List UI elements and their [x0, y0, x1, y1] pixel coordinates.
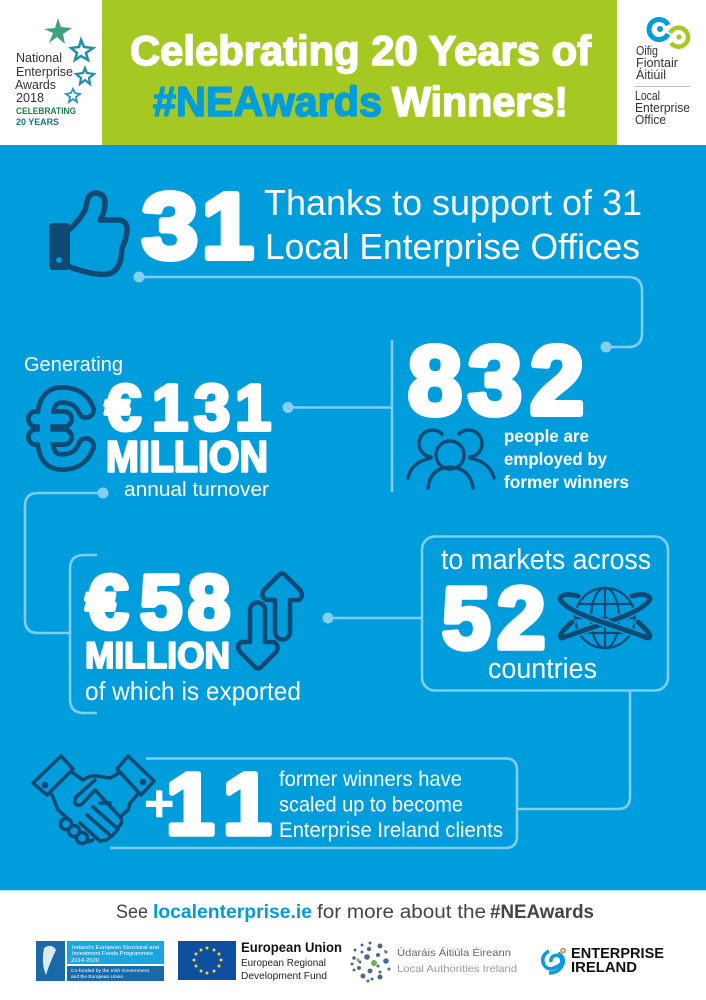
stat: 31: 1	[202, 174, 254, 278]
footer call to action: for more about the	[317, 902, 486, 923]
text: to markets across: to markets across	[441, 544, 651, 576]
logo: Ireland structural funds: 2014-2020	[71, 958, 99, 964]
panel: markets box	[422, 536, 668, 690]
logo: National Enterprise Awards: 2018	[16, 91, 44, 105]
connector: exports to markets	[322, 612, 422, 624]
title	[130, 27, 592, 125]
stat: 31	[142, 174, 254, 278]
icon: euro	[36, 395, 86, 462]
connector: turnover to exports	[25, 488, 108, 633]
text: former winners: scaled up to become	[279, 792, 463, 816]
title: #NEAwards	[153, 78, 382, 125]
logo: Ireland structural funds	[36, 941, 164, 981]
text: of which is exported: of which is exported	[85, 676, 301, 706]
icon: globe with orbits	[560, 588, 650, 648]
footer call to action	[116, 902, 594, 923]
logo: National Enterprise Awards: Enterprise	[16, 65, 73, 79]
logo: Local Authorities Ireland	[350, 942, 517, 982]
logo: National Enterprise Awards: Awards	[15, 78, 56, 92]
logo: National Enterprise Awards	[15, 18, 94, 128]
stat: 58 million: MILLION	[85, 635, 230, 676]
footer call to action: See	[116, 902, 148, 923]
bracket: exports	[70, 555, 97, 713]
logo: Ireland structural funds: and the European Union	[71, 974, 123, 980]
logo: Local Authorities Ireland: Údaráis Áitiúla Éireann	[397, 946, 511, 959]
logo: European Union: European Regional	[241, 957, 326, 969]
logo: European Union	[178, 940, 342, 982]
text: former winners	[279, 767, 503, 842]
logo: Local Enterprise Office	[635, 20, 690, 127]
panel: clients box outline	[110, 758, 517, 848]
connector: 131 to 832	[282, 340, 392, 492]
text: annual turnover: annual turnover	[124, 479, 269, 501]
logo: Local Enterprise Office: Oifig	[636, 43, 658, 58]
text: people employed: employed by	[504, 449, 607, 469]
logo: Local Enterprise Office: Office	[635, 112, 666, 127]
logo: Local Authorities Ireland: Local Authorities Ireland	[397, 963, 517, 975]
stat: 58 million: €58	[86, 560, 230, 646]
stat: plus 11: 11	[166, 756, 271, 853]
stat: 131 million: MILLION	[106, 432, 268, 482]
text: people employed	[504, 426, 629, 492]
logo: Ireland structural funds: Ireland's European Structural and	[72, 945, 159, 951]
logo: Local Enterprise Office: Local	[635, 88, 660, 103]
logo: Enterprise Ireland: IRELAND	[571, 959, 637, 976]
header band	[102, 0, 617, 145]
text: generating: Generating	[24, 354, 123, 376]
text: former winners: Enterprise Ireland clients	[279, 818, 503, 842]
text: thanks to support	[264, 182, 642, 267]
text: former winners: former winners have	[279, 767, 462, 791]
logo: Ireland structural funds: Investment Funds Programmes	[72, 951, 153, 957]
logo: National Enterprise Awards: National	[16, 51, 62, 65]
logo: National Enterprise Awards: 20 YEARS	[16, 117, 59, 128]
stat: plus 11: +	[144, 775, 174, 833]
stat: 131 million	[105, 371, 271, 482]
text: thanks to support: Local Enterprise Offices	[265, 226, 640, 267]
text: countries: countries	[488, 653, 597, 685]
text: people employed: former winners	[504, 472, 629, 492]
title: Celebrating 20 Years of	[130, 27, 592, 74]
connector: markets to clients	[517, 691, 630, 809]
logo: Local Enterprise Office: Áitiúil	[636, 67, 666, 82]
stat: 52: 52	[442, 570, 545, 667]
logo: Enterprise Ireland: ENTERPRISE	[571, 945, 664, 962]
stat: 832: 832	[408, 326, 584, 435]
blue main panel	[0, 145, 706, 890]
icon: up and down arrows	[238, 574, 302, 668]
logo: Enterprise Ireland	[543, 945, 664, 976]
footer call to action: #NEAwards	[490, 902, 594, 923]
logo: National Enterprise Awards: CELEBRATING	[16, 106, 76, 117]
logo: Ireland structural funds: Co-funded by the Irish Government	[71, 968, 150, 974]
icon: thumbs up	[49, 193, 127, 274]
text: people employed: people are	[504, 426, 589, 446]
text: thanks to support: Thanks to support of 31	[264, 182, 642, 223]
logo: Local Enterprise Office: Fiontair	[636, 55, 679, 70]
logo: European Union: European Union	[241, 940, 342, 955]
logo: European Union: Development Fund	[241, 970, 327, 982]
logo: Local Enterprise Office: Enterprise	[635, 100, 690, 115]
icon: handshake	[33, 756, 154, 844]
title: Winners!	[392, 78, 568, 125]
stat: 131 million: €131	[105, 371, 271, 444]
stat: 31: 3	[142, 174, 198, 278]
connector: 31 to 832	[134, 272, 642, 352]
icon: people	[408, 430, 494, 488]
footer call to action: localenterprise.ie	[153, 902, 312, 923]
